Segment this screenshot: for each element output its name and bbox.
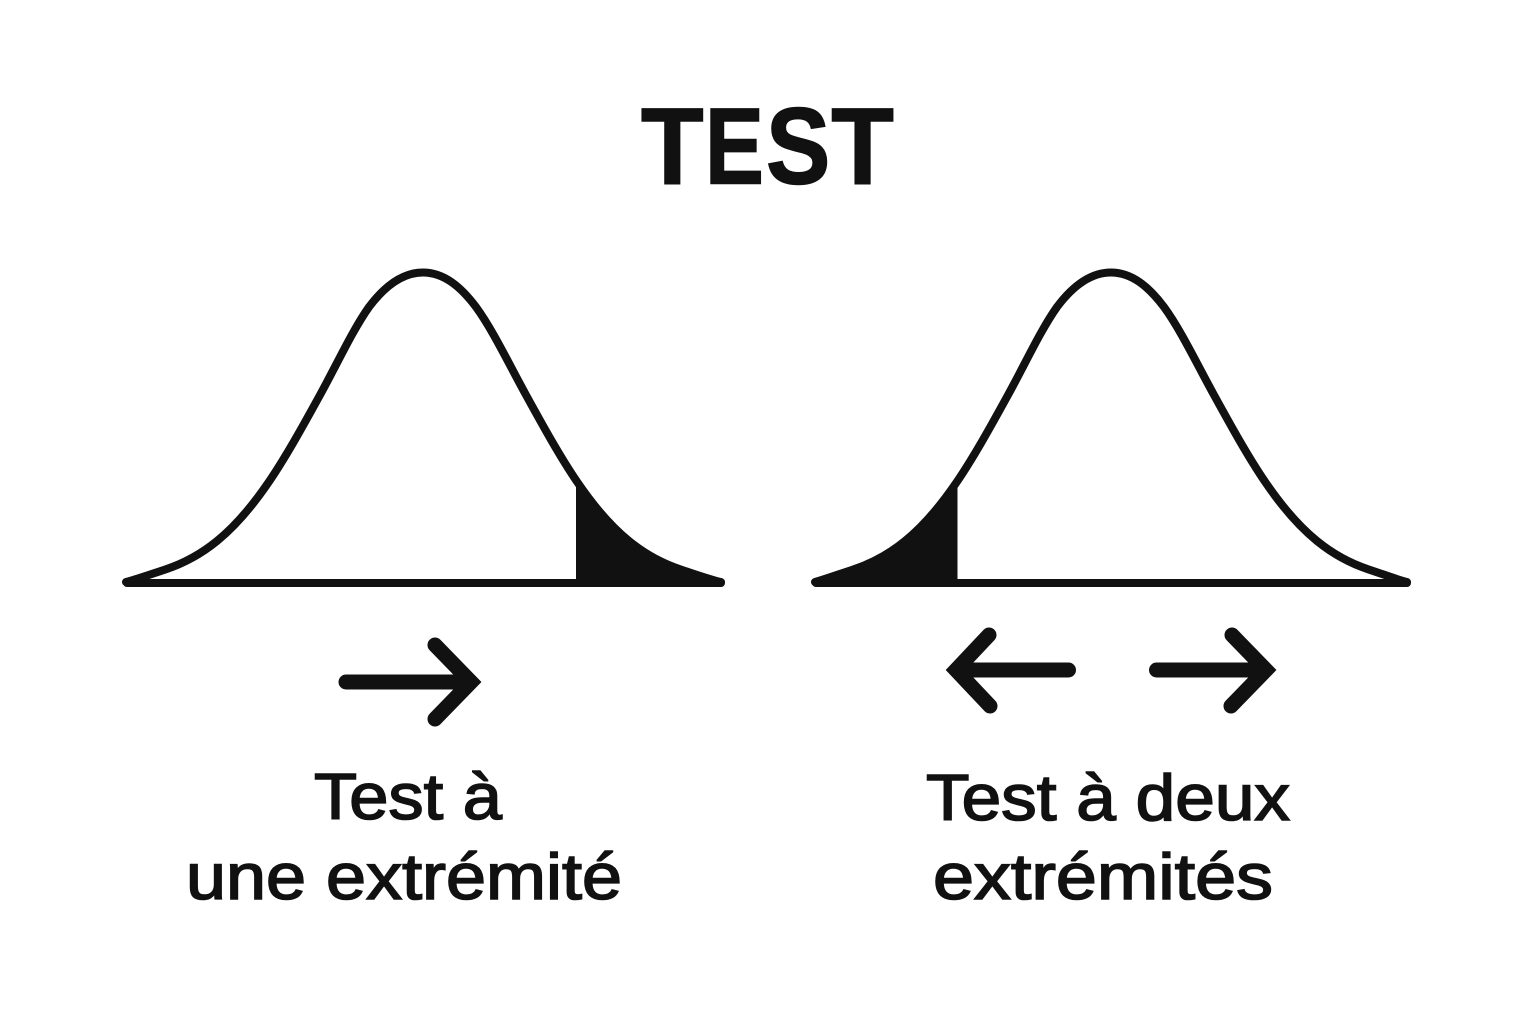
title: S	[766, 85, 830, 207]
label: one-tailed test: une extrémité	[186, 840, 622, 913]
title: T	[641, 86, 704, 207]
panel: two-tailed test	[815, 272, 1407, 913]
label: one-tailed test: Test à	[314, 760, 503, 833]
title: T	[831, 86, 894, 207]
panel: one-tailed test	[126, 272, 721, 913]
chart: two-tailed bell curve	[815, 272, 1407, 586]
chart: one-tailed bell curve	[126, 272, 721, 586]
label: two-tailed test: extrémités	[933, 840, 1273, 913]
title	[641, 85, 894, 208]
arrow: right	[346, 645, 471, 719]
label: two-tailed test: Test à deux	[926, 761, 1290, 834]
arrow: right	[1156, 635, 1266, 706]
title: E	[705, 86, 764, 208]
arrow: left	[956, 635, 1068, 706]
